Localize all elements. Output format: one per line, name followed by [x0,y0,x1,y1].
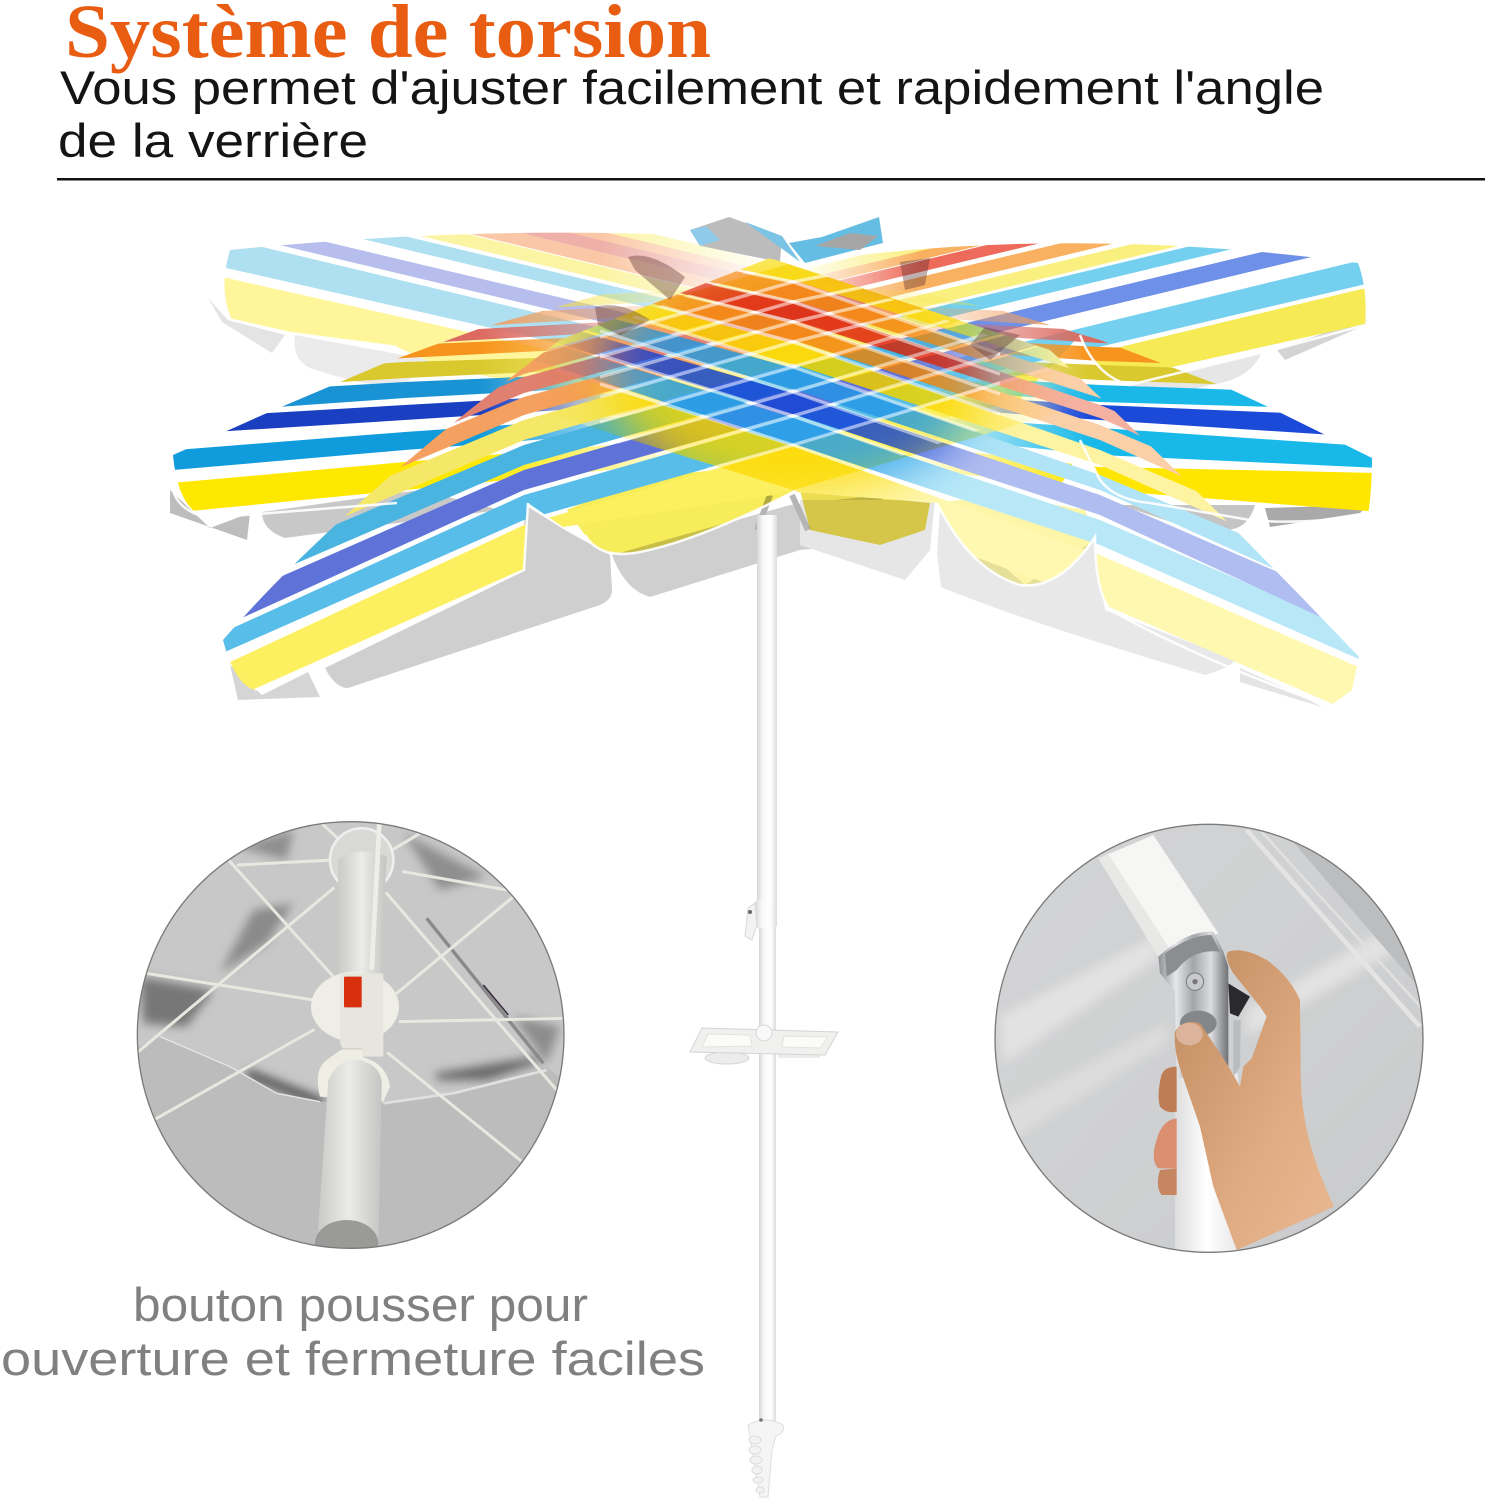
inset circle: tilt mechanism [993,823,1427,1260]
right stripes [620,243,1366,468]
lower tube [1175,1073,1238,1260]
centre plaid saturation [574,258,1008,502]
canopy bottom: stripes [223,258,1359,704]
hinge chrome [1158,932,1228,1078]
pole upper section [757,515,777,905]
left stripes [223,264,1062,690]
ribs [138,823,563,1160]
tilt collar [745,900,777,940]
umbrella with three tilted canopies [150,125,1380,1497]
caption: push button: bouton pousser pour [133,1278,588,1331]
hand [1154,950,1334,1250]
fingers behind pole [1159,1067,1177,1112]
upper right fabric [1294,843,1415,983]
palm and wrist [1175,950,1334,1250]
centre plaid highlights [600,271,1000,470]
circle outline [995,824,1423,1252]
header rule [57,178,1485,180]
zipper seam [427,918,543,1063]
right stripes [532,258,1359,704]
description text [58,61,1324,167]
runner collar [311,972,399,1042]
canopy ruffles near apex [595,256,1020,360]
lower tube [317,1060,382,1250]
left stripes [224,232,950,418]
canopy top vent [690,217,883,263]
lower canopy panel [133,1037,567,1253]
dark fabric folds [140,830,560,1103]
red button [344,977,362,1007]
pole lower section [759,905,776,1425]
description text: de la verrière [58,114,368,167]
canopy ribs at pole [757,495,808,530]
upper tube [1098,835,1218,957]
caption: push button [1,1278,705,1385]
left stripes [150,285,793,515]
upper tube [338,852,386,974]
circle outline [137,822,564,1248]
description text: Vous permet d'ajuster facilement et rapidement l'angle [60,61,1324,114]
top hub [330,828,393,892]
canopy middle: stripes [150,285,1380,515]
canopy white hems [173,320,1368,706]
lower knob [315,1220,378,1248]
canopy grey undersides [170,298,1368,707]
soft background bands [1000,936,1390,1133]
thumbnail [1176,1023,1203,1045]
yellow scallop panels below centre [567,462,1095,585]
inset circle: push button [133,817,570,1267]
runner sleeve [340,973,383,1057]
underside fabric [138,822,564,1104]
ground spike [748,1418,783,1497]
lower sleeve ring [318,1049,390,1102]
caption: push button: ouverture et fermeture faciles [1,1332,705,1385]
cup holder tray [690,1025,838,1064]
wall background [993,823,1427,1257]
canopy top: stripes [224,232,1366,468]
right stripes [793,286,1380,512]
